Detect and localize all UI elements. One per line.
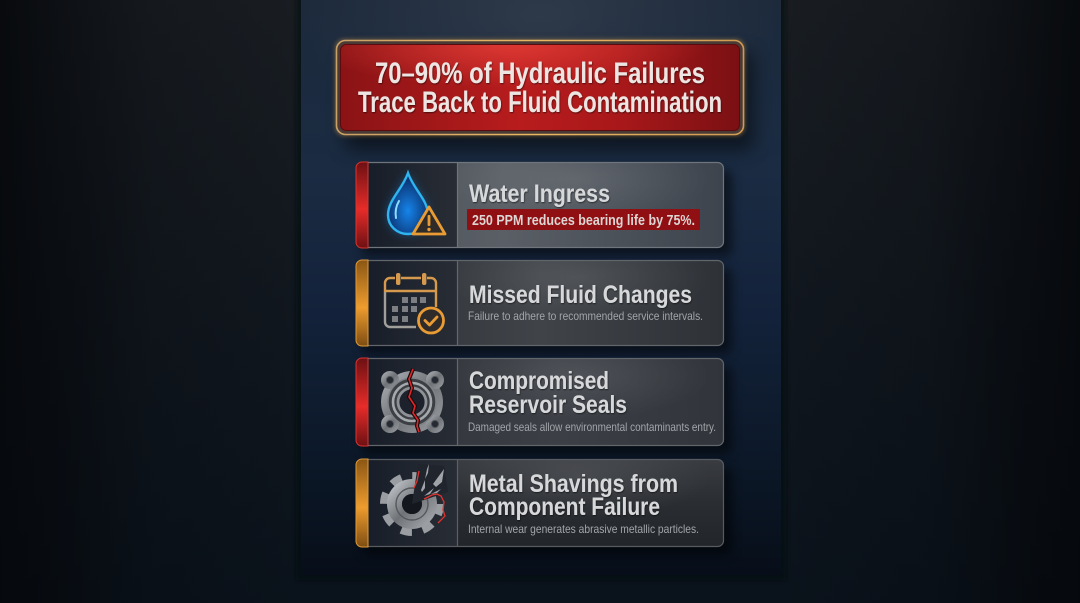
heading — [469, 470, 678, 521]
panel: title banner — [335, 39, 753, 150]
icon: water drop with warning — [388, 173, 445, 234]
panel: metal shavings — [356, 459, 732, 555]
icon: calendar with check — [385, 273, 444, 333]
description: Internal wear generates abrasive metallic particles. — [468, 522, 699, 536]
accent bar — [356, 260, 368, 346]
accent bar — [356, 162, 368, 248]
panel: missed fluid changes — [356, 260, 732, 354]
icon: cracked seal flange — [381, 369, 444, 433]
heading: Compromised — [469, 367, 609, 395]
description: Damaged seals allow environmental contaminants entry. — [468, 420, 716, 434]
heading: Water Ingress — [469, 180, 610, 208]
title text: 70–90% of Hydraulic Failures — [375, 57, 705, 90]
heading: Reservoir Seals — [469, 391, 627, 419]
panel: water ingress — [356, 162, 732, 256]
highlighted statistic — [467, 209, 700, 230]
panel: compromised reservoir seals — [356, 358, 732, 454]
title text — [358, 57, 722, 119]
heading — [469, 367, 627, 419]
icon: broken gear with shards — [384, 464, 448, 532]
heading: Component Failure — [469, 493, 660, 521]
description: Failure to adhere to recommended service intervals. — [468, 309, 703, 323]
accent bar — [356, 459, 368, 547]
accent bar — [356, 358, 368, 446]
heading: Missed Fluid Changes — [469, 281, 692, 309]
title text: Trace Back to Fluid Contamination — [358, 86, 722, 119]
heading: Metal Shavings from — [469, 470, 678, 498]
highlighted statistic: 250 PPM reduces bearing life by 75%. — [472, 213, 695, 229]
